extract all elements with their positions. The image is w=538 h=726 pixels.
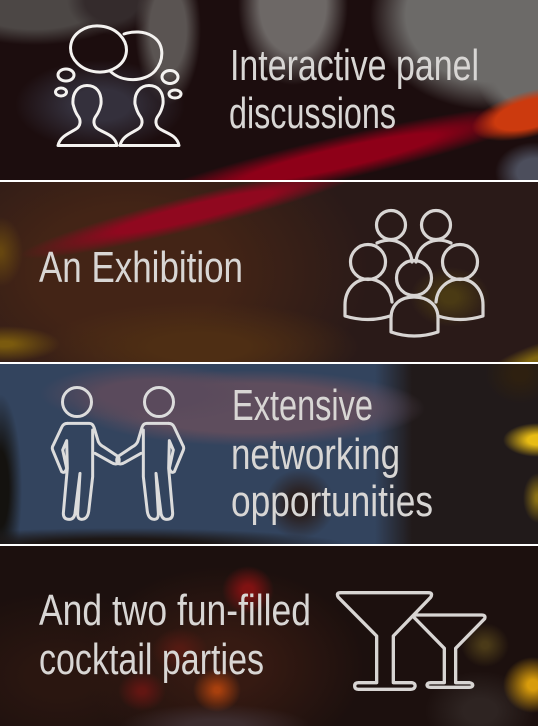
heading: interactive panel discussions: discussions bbox=[229, 89, 396, 138]
panel: interactive panel discussions bbox=[0, 0, 538, 180]
icon: two people holding hands bbox=[50, 386, 186, 521]
icon: two cocktail glasses bbox=[336, 591, 487, 691]
heading: interactive panel discussions bbox=[229, 41, 479, 138]
icon: two people talking bbox=[54, 24, 182, 147]
heading: extensive networking opportunities: networking bbox=[231, 430, 400, 479]
icon: group of people bbox=[343, 208, 485, 338]
panel: cocktail parties bbox=[0, 546, 538, 726]
heading: extensive networking opportunities bbox=[231, 384, 433, 526]
heading: and two fun-filled cocktail parties bbox=[39, 586, 311, 684]
panel: an exhibition bbox=[0, 182, 538, 362]
panel: extensive networking opportunities bbox=[0, 364, 538, 544]
panel background: blurred photo bbox=[0, 546, 538, 726]
panel background: blurred photo bbox=[0, 0, 538, 180]
panel background: blurred photo bbox=[0, 182, 538, 362]
panel background: blurred photo bbox=[0, 364, 538, 544]
